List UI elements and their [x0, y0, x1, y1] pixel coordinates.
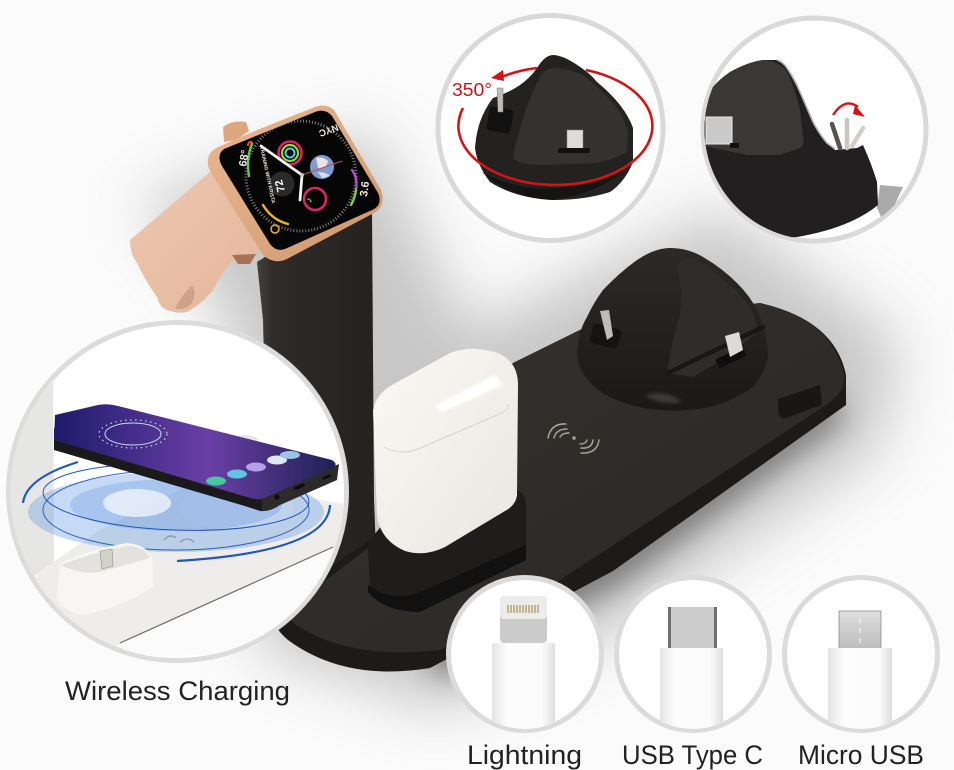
panel: wireless charging circle: [0, 322, 350, 660]
side micro usb connector: [486, 88, 514, 134]
panel: usb type c connector: [616, 578, 770, 738]
watch: [208, 106, 382, 261]
panel: lightning connector: [448, 578, 602, 743]
activity ring: [278, 142, 302, 164]
watch face labels: NYC: [317, 121, 340, 138]
red rotation arrow: [458, 68, 652, 185]
timer ring: ♪: [303, 196, 314, 204]
dock base: [273, 303, 846, 672]
small date dial: 72: [273, 178, 288, 193]
blue wave rings: [23, 459, 330, 561]
label: wireless charging: Wireless Charging: [65, 676, 290, 706]
white dock base: [36, 488, 344, 646]
side button: [778, 385, 822, 419]
phone app icons: [206, 451, 300, 486]
gauge arcs: [248, 142, 356, 224]
watch face labels: 68°: [237, 149, 252, 168]
rotation label: 350°: [452, 79, 492, 100]
rotating dock body: [475, 55, 633, 200]
dock side profile: [700, 60, 878, 245]
grey ledge: [877, 185, 903, 217]
charging stand column: [257, 210, 378, 600]
watch face labels: [237, 121, 372, 204]
pivoting pins: [832, 120, 863, 148]
cable body: [660, 648, 723, 738]
panel: tilting connector circle: [700, 18, 926, 245]
micro usb plug: [839, 611, 881, 649]
label: micro usb: Micro USB: [798, 740, 924, 770]
label: usb type c: USB Type C: [622, 740, 763, 770]
globe: [310, 155, 334, 179]
phone: [54, 404, 339, 511]
front lightning connector: [558, 130, 590, 153]
swivel dome: [577, 248, 768, 411]
type c connector: [706, 117, 739, 148]
complication icon: [271, 225, 279, 233]
panel: 350 degree rotation circle: [438, 16, 663, 240]
panel: micro usb connector: [784, 578, 938, 738]
cable body: [492, 643, 555, 729]
watch face labels: 3.6: [358, 181, 372, 197]
soft shadow behind dock: [140, 130, 900, 710]
wireless symbol on dock: [548, 424, 599, 453]
white stand post: [10, 383, 54, 576]
watch hands: [261, 146, 342, 200]
watch band: [130, 172, 260, 313]
airpods case: [373, 349, 518, 553]
cable body: [828, 648, 892, 738]
red tilt arrow: [833, 103, 865, 117]
watch face labels: TRAINING WITH KRISTA: [258, 146, 276, 204]
type c plug: [668, 607, 717, 649]
phone ports: [274, 474, 331, 500]
label: lightning: Lightning: [467, 740, 582, 770]
lightning dock cradle: [57, 543, 153, 615]
charging puck under phone: [238, 435, 258, 442]
lightning plug: [500, 596, 547, 643]
airpods holder: [368, 489, 526, 612]
